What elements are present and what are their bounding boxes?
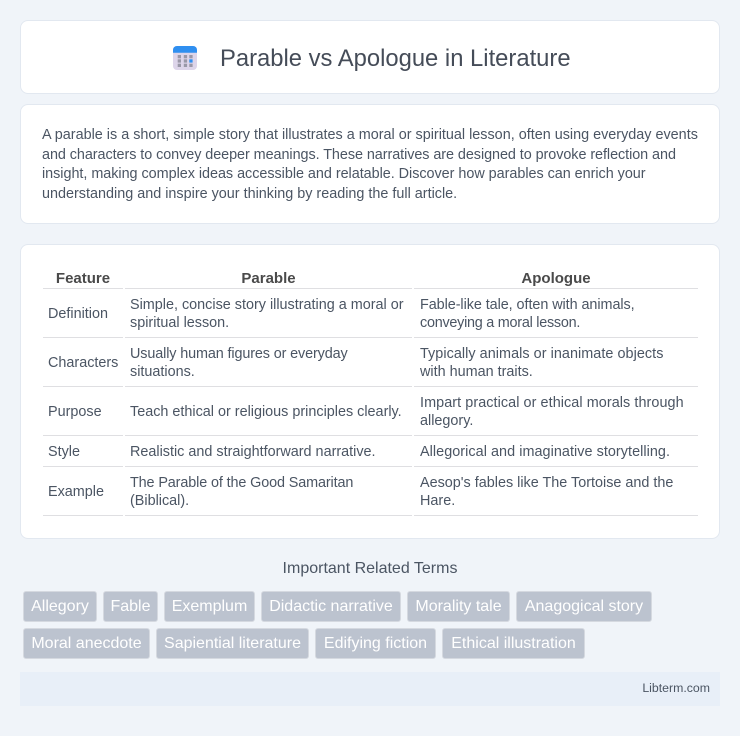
row: example: Hare. xyxy=(420,493,455,509)
related term tags: Exemplum xyxy=(172,598,247,615)
row: purpose: Purpose xyxy=(48,404,102,420)
intro text panel xyxy=(20,104,720,224)
row: characters: Characters xyxy=(48,355,118,371)
row: definition: conveying a moral lesson. xyxy=(420,315,580,331)
row: example: (Biblical). xyxy=(130,493,189,509)
row: characters: with human traits. xyxy=(420,364,533,380)
intro paragraph xyxy=(42,127,698,202)
related term tags: Fable xyxy=(110,598,151,615)
related term tags: Morality tale xyxy=(415,598,502,615)
comparison table panel xyxy=(20,244,720,539)
table header row: Parable xyxy=(241,270,296,287)
row: style xyxy=(48,444,670,460)
intro paragraph: and characters to convey deeper meanings. These narratives are designed to provoke reflection and xyxy=(42,146,676,162)
title: Parable vs Apologue in Literature xyxy=(220,45,571,72)
row: example: The Parable of the Good Samaritan xyxy=(130,475,353,491)
related term tags: Ethical illustration xyxy=(451,635,576,652)
intro paragraph: A parable is a short, simple story that illustrates a moral or spiritual lesson, often using everyday events xyxy=(42,127,698,143)
row: purpose: Impart practical or ethical morals through xyxy=(420,395,684,411)
related term tags: Didactic narrative xyxy=(269,598,393,615)
row: definition: Definition xyxy=(48,306,108,322)
intro paragraph: understanding and inspire your thinking by reading the full article. xyxy=(42,186,457,202)
table header row xyxy=(56,270,591,287)
related term tags: Anagogical story xyxy=(525,598,643,615)
related term tags: Allegory xyxy=(31,598,89,615)
row: purpose: allegory. xyxy=(420,413,473,429)
row: example: Aesop's fables like The Tortoise and the xyxy=(420,475,673,491)
icon: calendar xyxy=(173,46,197,70)
row: definition: Fable-like tale, often with animals, xyxy=(420,297,635,313)
row: style: Style xyxy=(48,444,80,460)
related term tags: Sapiential literature xyxy=(164,635,301,652)
row: characters: Usually human figures or everyday xyxy=(130,346,348,362)
row: example: Example xyxy=(48,484,104,500)
row: definition: Simple, concise story illustrating a moral or xyxy=(130,297,404,313)
table header row: Apologue xyxy=(521,270,591,287)
table header row: Feature xyxy=(56,270,110,287)
row: characters xyxy=(48,346,663,380)
row: definition: spiritual lesson. xyxy=(130,315,229,331)
row: example xyxy=(48,475,673,509)
intro paragraph: insight, making complex ideas accessible and relatable. Discover how parables can enrich your xyxy=(42,166,646,182)
row: purpose: Teach ethical or religious principles clearly. xyxy=(130,404,402,420)
row: characters: Typically animals or inanimate objects xyxy=(420,346,663,362)
related term tags xyxy=(23,591,652,659)
row: purpose xyxy=(48,395,684,429)
related term tags: Moral anecdote xyxy=(31,635,142,652)
row: style: Allegorical and imaginative storytelling. xyxy=(420,444,670,460)
row: style: Realistic and straightforward narrative. xyxy=(130,444,376,460)
related term tags: Edifying fiction xyxy=(324,635,427,652)
related terms heading: Important Related Terms xyxy=(283,560,457,577)
row: characters: situations. xyxy=(130,364,195,380)
footer credit: Libterm.com xyxy=(642,681,710,695)
row: definition xyxy=(48,297,635,331)
header card xyxy=(20,20,720,94)
footer bar xyxy=(20,672,720,706)
